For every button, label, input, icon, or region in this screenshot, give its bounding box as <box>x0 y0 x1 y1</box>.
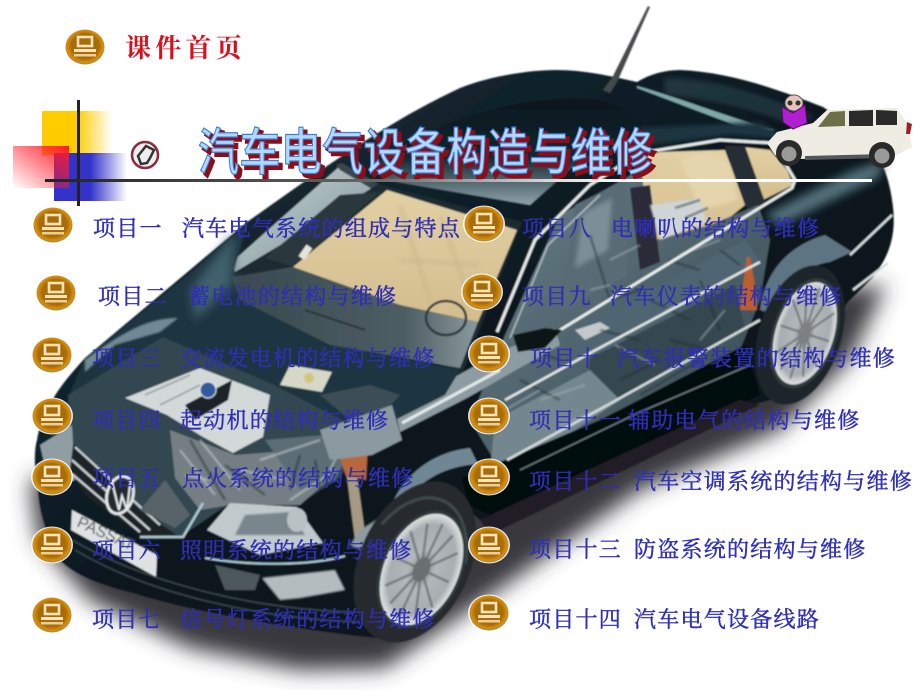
ground shadow <box>30 285 886 670</box>
front wheel <box>329 462 501 662</box>
left column project list: 项目七 <box>92 607 162 632</box>
right column project list: 项目八 <box>522 216 592 241</box>
right column project list: 项目十一 <box>529 408 622 433</box>
headlight <box>207 503 323 555</box>
rear wheel <box>739 254 861 416</box>
chrome window lines <box>497 140 795 332</box>
engine detail strokes <box>180 440 345 500</box>
beige interior behind windshield <box>293 190 517 322</box>
left column project list: 起动机的结构与维修 <box>180 408 389 433</box>
left column project list: 项目一 <box>93 216 163 241</box>
rear interior seats <box>640 150 745 245</box>
left column project list: 照明系统的结构与维修 <box>180 538 413 563</box>
right column project list: 防盗系统的结构与维修 <box>634 537 867 562</box>
left column project list: 项目二 <box>98 284 168 309</box>
sill purple underside <box>480 400 760 535</box>
spoiler sheen <box>665 78 815 122</box>
rear fender <box>760 235 852 315</box>
VW badge <box>103 473 137 517</box>
right column project list: 汽车仪表的结构与维修 <box>610 284 843 309</box>
antenna <box>603 6 650 93</box>
b pillar <box>725 146 765 212</box>
right column project list <box>522 216 913 632</box>
home icon <box>64 28 106 66</box>
rear body sheen <box>765 160 885 225</box>
inner door detail <box>265 192 380 266</box>
rear body chrome <box>850 215 892 290</box>
right column project list: 项目十三 <box>529 537 622 562</box>
car body <box>35 70 894 640</box>
left column project list: 项目六 <box>92 538 162 563</box>
number plate <box>71 510 157 577</box>
black sill <box>462 345 760 515</box>
engine cover <box>125 368 270 453</box>
roof gloss <box>372 99 644 205</box>
right column project list: 项目十 <box>530 346 600 371</box>
front strut <box>346 468 366 540</box>
hood <box>70 225 460 435</box>
mechanical detail strokes <box>520 235 740 400</box>
left column project list: 项目五 <box>92 466 162 491</box>
right column project list: 汽车电气设备线路 <box>634 607 820 632</box>
cabin tube <box>560 240 760 360</box>
lower grille chrome <box>140 503 203 537</box>
left column icons <box>31 206 77 634</box>
left column project list: 蓄电池的结构与维修 <box>188 284 397 309</box>
car illustration: PASSAT <box>74 514 137 554</box>
left headlamp <box>40 425 75 490</box>
right column project list: 辅助电气的结构与维修 <box>628 408 861 433</box>
grille <box>70 445 180 537</box>
left column project list: 点火系统的结构与维修 <box>182 466 415 491</box>
engine bay <box>68 337 365 537</box>
dashboard <box>232 267 478 368</box>
right column project list: 电喇叭的结构与维修 <box>611 216 820 241</box>
title: 汽车电气设备构造与维修 <box>202 127 657 185</box>
orange damper <box>740 257 757 310</box>
left column project list: 交流发电机的结构与维修 <box>180 346 436 371</box>
front wheel arch <box>385 448 478 530</box>
trunk highlight <box>637 86 775 132</box>
steering wheel <box>426 301 466 335</box>
right column icons <box>461 206 510 632</box>
cut-away mechanicals under cabin <box>470 170 770 470</box>
left column project list: 项目四 <box>92 408 162 433</box>
bumper grooves <box>72 540 358 622</box>
right column project list: 汽车报警装置的结构与维修 <box>617 346 896 371</box>
home link: 课件首页 <box>125 34 246 63</box>
right column project list: 项目九 <box>522 284 592 309</box>
left column project list: 汽车电气系统的组成与特点 <box>182 216 461 241</box>
rear pillar sheen <box>640 122 790 145</box>
title: 汽车电气设备构造与维修 <box>198 124 653 181</box>
windshield frame <box>230 184 522 374</box>
chrome door belt <box>505 262 760 400</box>
right column project list: 项目十二 <box>529 469 622 494</box>
engine logo <box>200 382 216 398</box>
front chrome tube <box>395 328 560 432</box>
right column project list: 汽车空调系统的结构与维修 <box>634 469 913 494</box>
left column project list: 信号灯系统的结构与维修 <box>180 607 436 632</box>
left column project list: 项目三 <box>92 346 162 371</box>
right column project list: 项目十四 <box>529 607 622 632</box>
decorative squares and rule <box>13 100 872 206</box>
side glass triangle <box>232 166 378 272</box>
radiator lower <box>262 570 345 600</box>
reader with purple book <box>782 95 807 129</box>
mirror <box>513 328 562 352</box>
left column project list <box>92 216 461 632</box>
small logo <box>132 142 158 168</box>
suv picture <box>767 108 912 168</box>
